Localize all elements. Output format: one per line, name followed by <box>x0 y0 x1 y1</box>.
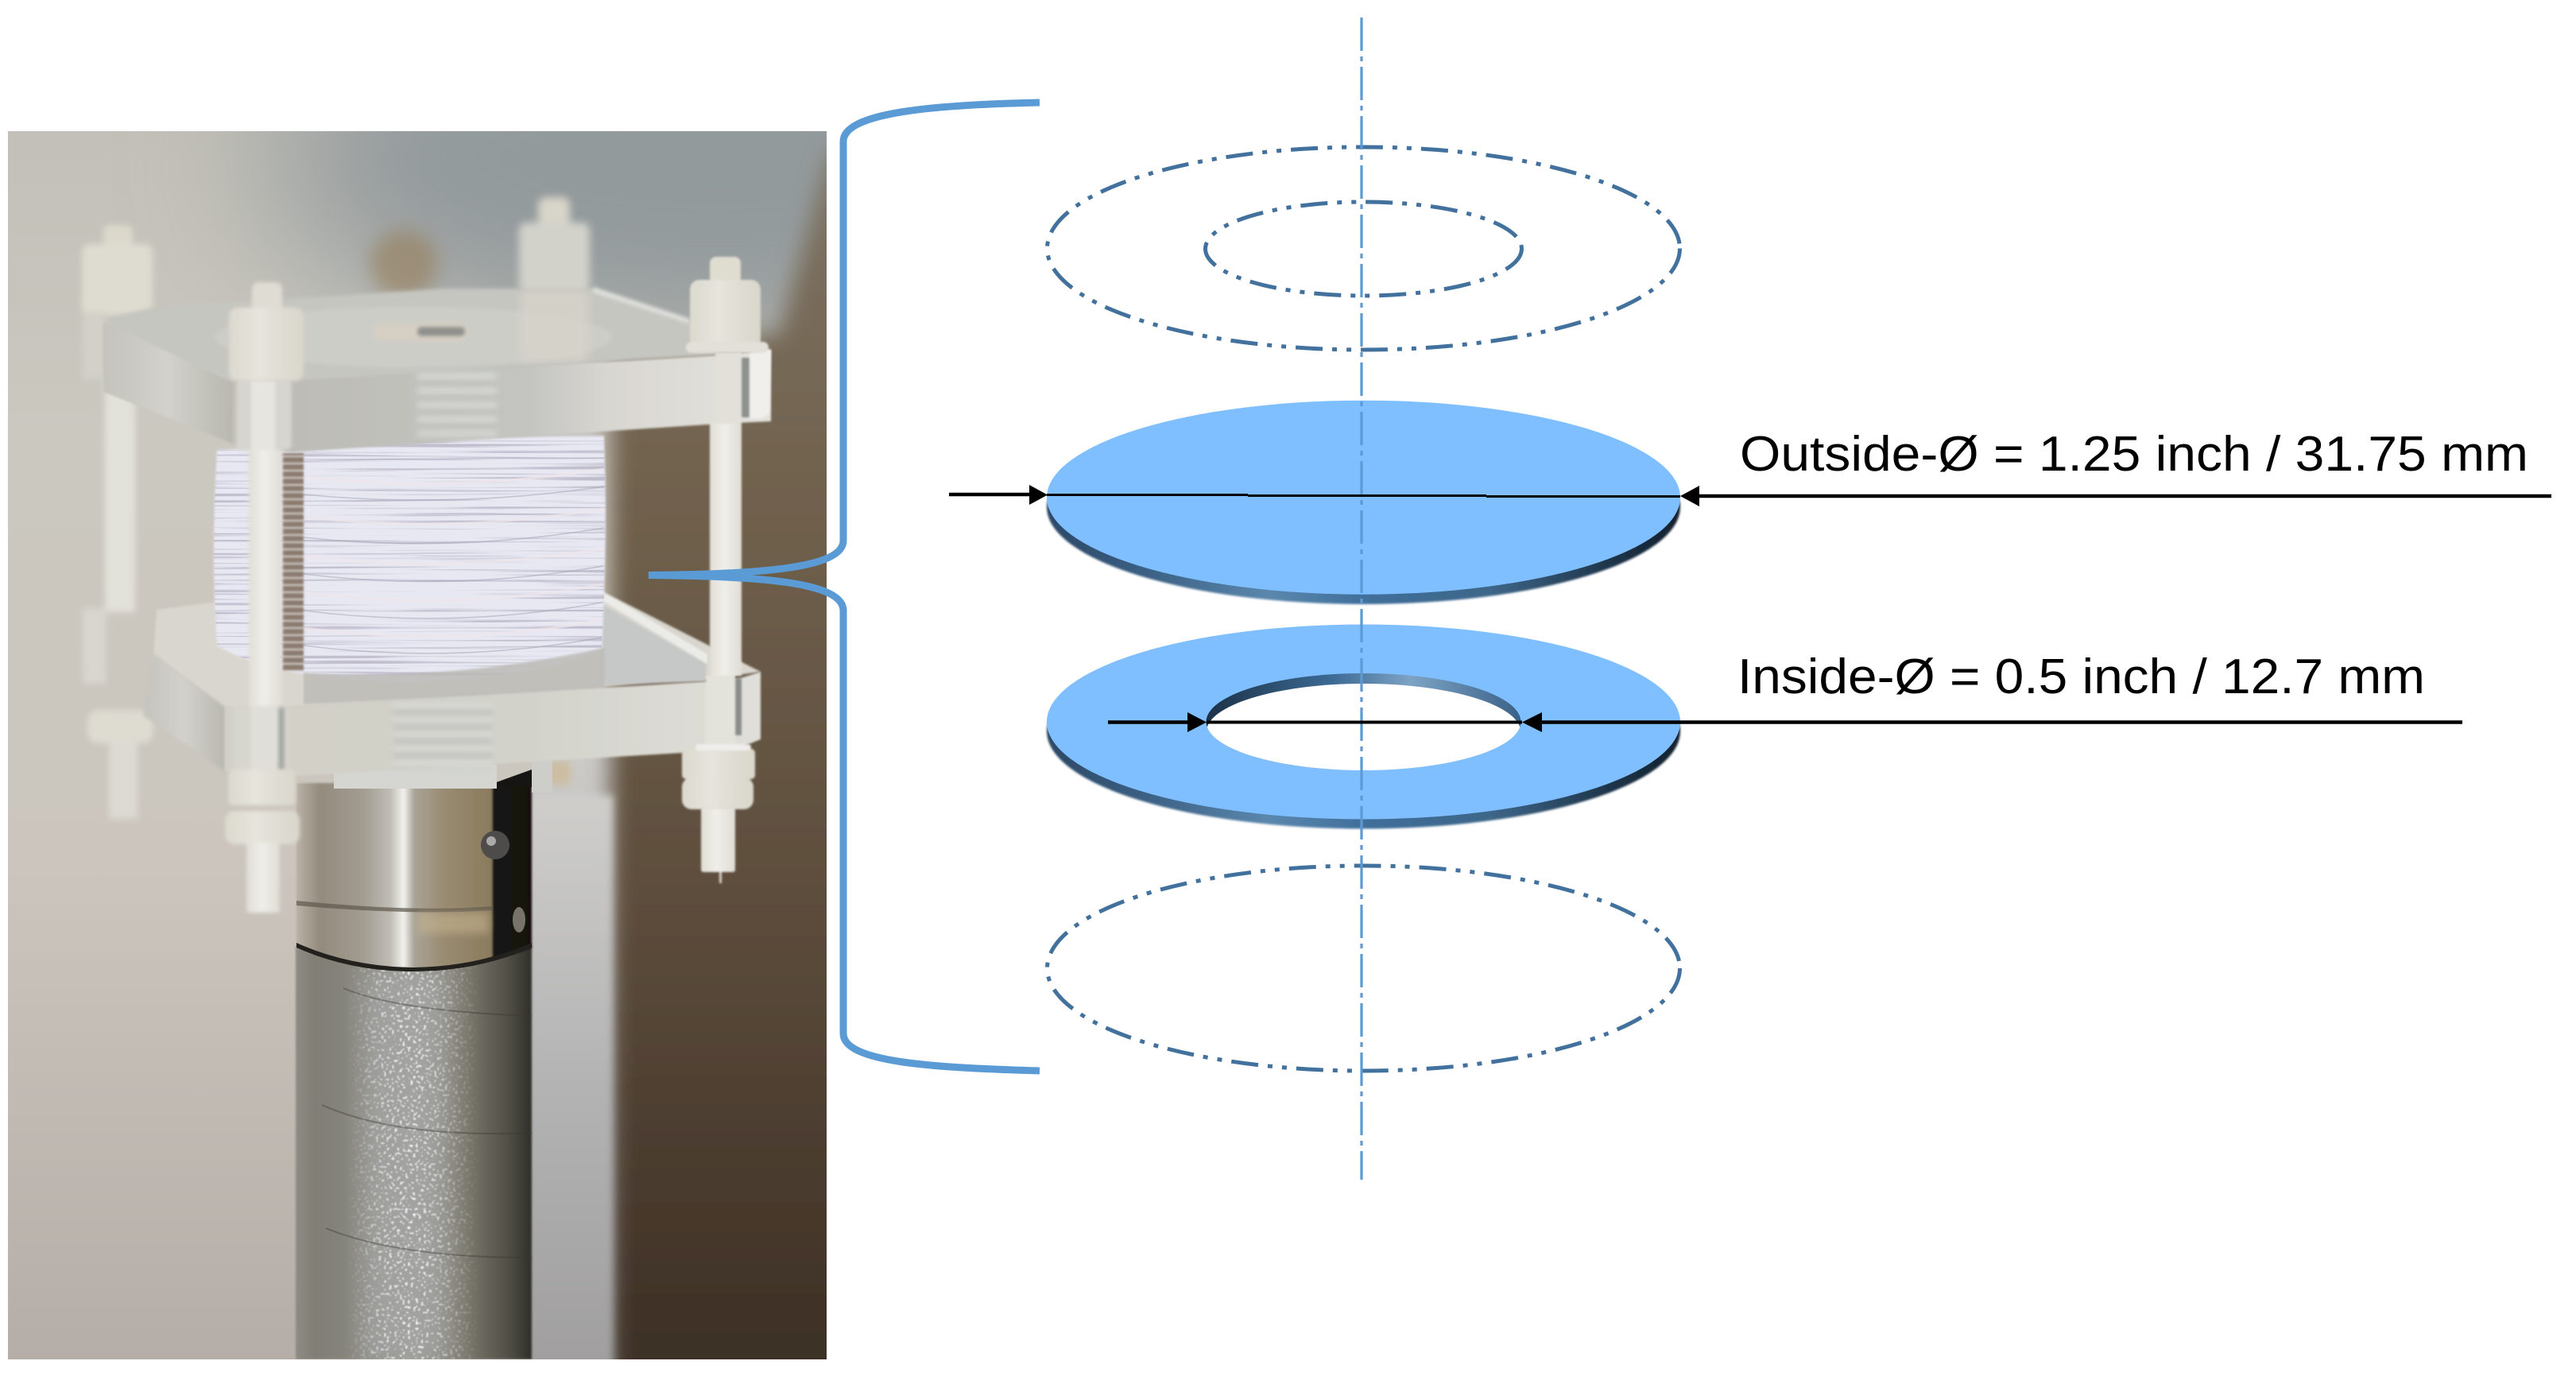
inner hole wall <box>1207 673 1521 770</box>
lower centre bolt seen through plate <box>396 711 490 765</box>
outside diameter label: Outside-Ø = 1.25 inch / 31.75 mm <box>1740 427 2528 482</box>
back left nut <box>82 225 153 379</box>
ring top surface <box>1047 625 1680 819</box>
metal collar with set screws <box>296 765 532 971</box>
dashed outline: upper plate ring <box>1048 147 1680 350</box>
inside diameter dimension arrows <box>1108 712 2462 732</box>
lower acrylic plate top surface <box>153 592 761 708</box>
front right threaded rod <box>701 349 771 883</box>
upper plate left side face <box>103 322 233 444</box>
dashed outline: lower plate <box>1048 866 1680 1071</box>
upper plate top surface with filter disc <box>122 286 717 370</box>
lower plate front face <box>225 672 761 777</box>
solid filter disc <box>1047 401 1680 604</box>
curly bracket linking photo to disc stack <box>649 103 1040 1071</box>
back right nut <box>519 197 590 785</box>
upper dashed outer ellipse <box>1048 147 1680 350</box>
inside diameter label: Inside-Ø = 0.5 inch / 12.7 mm <box>1737 649 2425 704</box>
paper filter stack <box>214 436 606 682</box>
brown thread seen through stack <box>282 453 304 671</box>
upper dashed inner ellipse <box>1205 202 1521 296</box>
outside diameter dimension arrows <box>949 485 2551 506</box>
front left upper nut <box>229 282 304 381</box>
upper plate centre hole <box>377 324 467 339</box>
front left threaded rod <box>233 380 292 773</box>
ring rim <box>1047 634 1680 828</box>
front right lower nut <box>682 744 755 809</box>
photo: assembled filter holder on metal rod <box>8 131 827 1359</box>
hole opening <box>1207 684 1521 781</box>
disc rim <box>1047 410 1680 604</box>
upper plate front face <box>233 350 771 452</box>
upper centre bolt threads <box>417 368 497 436</box>
disc top surface <box>1047 401 1680 595</box>
stack seen through lower plate <box>304 648 604 704</box>
vertical centre axis <box>1360 17 1363 1180</box>
photo background wall <box>8 131 827 1359</box>
lower plate left side face <box>143 671 224 770</box>
back right nut reflection in plate <box>521 290 588 362</box>
front right upper nut <box>686 257 769 353</box>
back left threaded rod <box>83 374 153 819</box>
white band of wall beside collar <box>532 761 552 793</box>
metal cylinder rod <box>296 946 532 1363</box>
front left lower nut and stud <box>225 770 300 913</box>
ring-shaped filter disc <box>1047 625 1680 828</box>
